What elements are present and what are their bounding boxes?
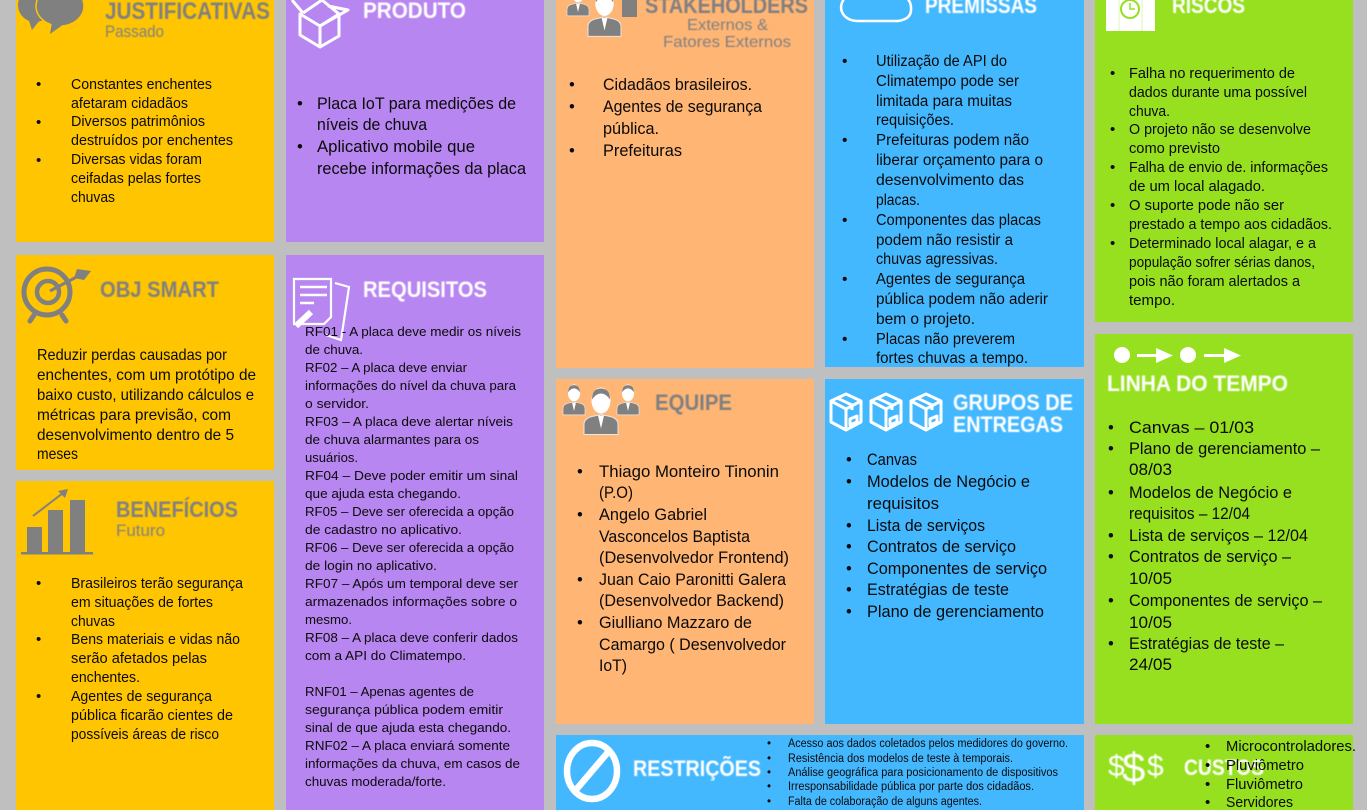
text block: timeline list: • xyxy=(1108,592,1114,610)
text block: entregas list: • xyxy=(846,603,852,621)
text block: requisitos list: com a API do Climatempo. xyxy=(305,648,466,663)
text block: entregas list: Estratégias de teste xyxy=(867,581,1009,599)
text block: requisitos list: RNF01 – Apenas agentes de xyxy=(305,684,474,699)
text block: restricoes list: Resistência dos modelos de teste à temporais. xyxy=(788,753,1013,765)
heading: equipe: EQUIPE xyxy=(655,390,732,415)
text block: restricoes list: Análise geográfica para posicionamento de dispositivos xyxy=(788,767,1058,779)
text block: requisitos list: de cadastro no aplicativo. xyxy=(305,522,462,537)
text block: justificativas list: Constantes enchentes xyxy=(71,76,212,93)
text block: justificativas list: ceifadas pelas fortes xyxy=(71,170,201,187)
text block: riscos list: • xyxy=(1110,65,1115,82)
text block: timeline list: Componentes de serviço – xyxy=(1129,592,1323,610)
text block: timeline list: Estratégias de teste – xyxy=(1129,635,1285,653)
text block: beneficios list: • xyxy=(36,631,41,648)
text block: timeline list: • xyxy=(1108,548,1114,566)
text block: entregas list: • xyxy=(846,473,852,491)
text block: entregas list: Contratos de serviço xyxy=(867,538,1016,556)
text block: stakeholders list: pública. xyxy=(603,120,659,138)
text block: beneficios list: chuvas xyxy=(71,613,115,630)
icon: dollar signs xyxy=(1108,744,1164,791)
panel: restricoes xyxy=(556,735,1084,810)
icon: timeline arrows xyxy=(1114,347,1241,363)
text block: restricoes list: • xyxy=(767,753,771,765)
text block: objective: desenvolvimento dentro de 5 xyxy=(37,427,234,444)
heading: obj smart: OBJ SMART xyxy=(100,277,220,302)
text block: justificativas list: Diversos patrimônios xyxy=(71,113,205,130)
panel: riscos xyxy=(1095,0,1353,322)
text block: premissas list: desenvolvimento das xyxy=(876,172,1024,189)
icon: dollar signs: $ xyxy=(1122,744,1145,791)
text block: requisitos list: RF06 – Deve ser oferecida a opção xyxy=(305,540,514,555)
text block: premissas list: Placas não preverem xyxy=(876,331,1015,348)
text block: custos list: Fluviômetro xyxy=(1226,776,1303,793)
text block: riscos list: prestado a tempo aos cidadãos. xyxy=(1129,216,1332,233)
subheading: externos e fatores externos: Externos & xyxy=(687,17,768,34)
text block: timeline list: 10/05 xyxy=(1129,614,1172,632)
text block: requisitos list: informações da chuva, em casos de xyxy=(305,756,520,771)
text block: custos list xyxy=(1205,738,1356,810)
text block: objective xyxy=(37,347,256,463)
text block: premissas list: podem não resistir a xyxy=(876,232,1013,249)
text block: entregas list: Componentes de serviço xyxy=(867,560,1047,578)
text block: beneficios list: • xyxy=(36,575,41,592)
text block: stakeholders list: • xyxy=(569,142,575,160)
text block: requisitos list: o servidor. xyxy=(305,396,369,411)
text block: produto list: Aplicativo mobile que xyxy=(317,138,475,156)
text block: riscos list: • xyxy=(1110,159,1115,176)
text block: requisitos list: usuários. xyxy=(305,450,358,465)
text block: timeline list: Canvas – 01/03 xyxy=(1129,419,1254,437)
text block: riscos list: como previsto xyxy=(1129,140,1220,157)
icon: cloud xyxy=(841,0,911,21)
text block: premissas list: limitada para muitas xyxy=(876,93,1012,110)
text block: beneficios list: serão afetados pelas xyxy=(71,650,207,667)
text block: timeline list: 24/05 xyxy=(1129,656,1172,674)
text block: justificativas list: Diversas vidas foram xyxy=(71,151,202,168)
text block: justificativas list: chuvas xyxy=(71,189,115,206)
text block: stakeholders list: Prefeituras xyxy=(603,142,682,160)
text block: team list: • xyxy=(577,614,583,632)
icon: three boxes xyxy=(831,394,941,430)
icon: open box xyxy=(292,0,348,47)
text block: riscos list: pois não foram alertados a xyxy=(1129,273,1301,290)
text block: produto list: níveis de chuva xyxy=(317,116,428,134)
text block: requisitos list: RF04 – Deve poder emitir um sinal xyxy=(305,468,518,483)
text block: premissas list: • xyxy=(842,132,847,149)
text block: produto list: • xyxy=(297,138,303,156)
text block: requisitos list: RF03 – A placa deve alertar níveis xyxy=(305,414,513,429)
text block: justificativas list: • xyxy=(36,76,41,93)
text block: premissas list: chuvas agressivas. xyxy=(876,251,998,268)
text block: entregas list: Modelos de Negócio e xyxy=(867,473,1030,491)
text block: riscos list: de um local alagado. xyxy=(1129,178,1265,195)
text block: riscos list: O projeto não se desenvolve xyxy=(1129,121,1311,138)
text block: beneficios list: pública ficarão cientes de xyxy=(71,707,233,724)
text block: team list: (P.O) xyxy=(599,484,633,502)
text block: objective: Reduzir perdas causadas por xyxy=(37,347,228,364)
text block: riscos list xyxy=(1110,65,1332,309)
text block: beneficios list xyxy=(36,575,244,743)
text block: requisitos list: RF01 - A placa deve medir os níveis xyxy=(305,324,521,339)
text block: requisitos list: que ajuda esta chegando. xyxy=(305,486,461,501)
text block: objective: baixo custo, utilizando cálculos e xyxy=(37,387,254,404)
text block: requisitos list: informações do nível da chuva para xyxy=(305,378,517,393)
text block: produto list: Placa IoT para medições de xyxy=(317,95,516,113)
text block: entregas list: Lista de serviços xyxy=(867,517,985,535)
text block: objective: métricas para previsão, com xyxy=(37,407,231,424)
text block: riscos list: Falha no requerimento de xyxy=(1129,65,1295,82)
text block: timeline list: requisitos – 12/04 xyxy=(1129,505,1250,523)
text block: restricoes list: • xyxy=(767,738,771,750)
text block: timeline list xyxy=(1108,419,1323,674)
text block: stakeholders list: Agentes de segurança xyxy=(603,98,763,116)
subheading: passado: Passado xyxy=(105,22,164,41)
icon: prohibited sign xyxy=(567,743,617,799)
panel: obj smart xyxy=(16,255,274,470)
text block: premissas list: Componentes das placas xyxy=(876,212,1041,229)
text block: restricoes list: • xyxy=(767,781,771,793)
text block: team list: IoT) xyxy=(599,657,627,675)
text block: beneficios list: enchentes. xyxy=(71,669,140,686)
text block: premissas list: • xyxy=(842,212,847,229)
text block: premissas list: placas. xyxy=(876,192,920,209)
subheading: externos e fatores externos xyxy=(663,17,791,51)
text block: beneficios list: possíveis áreas de risco xyxy=(71,726,219,743)
text block: justificativas list: • xyxy=(36,114,41,131)
subheading: futuro: Futuro xyxy=(116,521,165,540)
text block: timeline list: Modelos de Negócio e xyxy=(1129,484,1292,502)
text block: team list: • xyxy=(577,463,583,481)
text block: premissas list: pública podem não aderir xyxy=(876,291,1048,308)
text block: premissas list: • xyxy=(842,331,847,348)
text block: entregas list: • xyxy=(846,560,852,578)
panel: stakeholders xyxy=(556,0,814,368)
text block: riscos list: Determinado local alagar, e a xyxy=(1129,235,1317,252)
panel: grupos de entregas xyxy=(825,379,1084,724)
panel: equipe xyxy=(556,379,814,724)
text block: premissas list: Prefeituras podem não xyxy=(876,132,1029,149)
text block: team list: (Desenvolvedor Backend) xyxy=(599,592,784,610)
text block: restricoes list xyxy=(767,738,1068,808)
icon: dollar signs: $ xyxy=(1108,750,1125,783)
text block: requisitos list: armazenados informações sobre o xyxy=(305,594,517,609)
text block: entregas list: • xyxy=(846,517,852,535)
text block: objective: meses xyxy=(37,446,78,463)
text block: restricoes list: • xyxy=(767,767,771,779)
panel: produto xyxy=(286,0,544,242)
text block: requisitos list: RF02 – A placa deve enviar xyxy=(305,360,468,375)
text block: custos list: Pluviômetro xyxy=(1226,757,1304,774)
panel: requisitos xyxy=(286,255,544,810)
text block: stakeholders list xyxy=(569,76,763,160)
heading: grupos de entregas: ENTREGAS xyxy=(953,412,1063,437)
icon: bar chart xyxy=(21,489,93,554)
panel: custos xyxy=(1095,735,1356,810)
text block: riscos list: O suporte pode não ser xyxy=(1129,197,1284,214)
text block: entregas list: Canvas xyxy=(867,451,917,469)
text block: requisitos list xyxy=(305,324,521,789)
text block: entregas list: requisitos xyxy=(867,495,939,513)
text block: riscos list: tempo. xyxy=(1129,292,1175,309)
text block: beneficios list: Bens materiais e vidas não xyxy=(71,631,240,648)
heading: beneficios: BENEFÍCIOS xyxy=(116,497,238,522)
heading: linha do tempo: LINHA DO TEMPO xyxy=(1107,371,1288,396)
text block: timeline list: • xyxy=(1108,635,1114,653)
icon: team people xyxy=(563,384,639,434)
text block: requisitos list: de login no aplicativo. xyxy=(305,558,437,573)
text block: premissas list: Utilização de API do xyxy=(876,53,1007,70)
text block: riscos list: chuva. xyxy=(1129,103,1170,120)
text block: team list: (Desenvolvedor Frontend) xyxy=(599,549,789,567)
text block: beneficios list: em situações de fortes xyxy=(71,594,213,611)
text block: restricoes list: Irresponsabilidade pública por parte dos cidadãos. xyxy=(788,781,1034,793)
text block: team list xyxy=(577,463,789,675)
text block: restricoes list: Acesso aos dados coletados pelos medidores do governo. xyxy=(788,738,1068,750)
text block: justificativas list: afetaram cidadãos xyxy=(71,95,188,112)
text block: riscos list: • xyxy=(1110,121,1115,138)
heading: restricoes: RESTRIÇÕES xyxy=(633,756,761,781)
text block: requisitos list: RF08 – A placa deve conferir dados xyxy=(305,630,518,645)
text block: entregas list: Plano de gerenciamento xyxy=(867,603,1044,621)
text block: requisitos list: de chuva. xyxy=(305,342,363,357)
text block: justificativas list xyxy=(36,76,233,206)
heading: requisitos: REQUISITOS xyxy=(363,277,487,302)
text block: requisitos list: RNF02 – A placa enviará somente xyxy=(305,738,510,753)
text block: objective: enchentes, com um protótipo de xyxy=(37,367,256,384)
icon: documents xyxy=(294,279,349,340)
heading: grupos de entregas: GRUPOS DE xyxy=(953,390,1073,415)
text block: produto list: • xyxy=(297,95,303,113)
text block: team list: Giulliano Mazzaro de xyxy=(599,614,752,632)
text block: produto list: recebe informações da placa xyxy=(317,160,527,178)
text block: riscos list: • xyxy=(1110,235,1115,252)
text block: premissas list: • xyxy=(842,271,847,288)
panel: premissas xyxy=(825,0,1084,367)
text block: timeline list: 10/05 xyxy=(1129,570,1172,588)
heading: grupos de entregas xyxy=(953,390,1073,437)
text block: stakeholders list: • xyxy=(569,76,575,94)
text block: team list: Camargo ( Desenvolvedor xyxy=(599,636,786,654)
text block: team list: • xyxy=(577,571,583,589)
text block: timeline list: 08/03 xyxy=(1129,461,1172,479)
text block: custos list: Microcontroladores. xyxy=(1226,738,1356,755)
panel: beneficios xyxy=(16,481,274,810)
text block: timeline list: Lista de serviços – 12/04 xyxy=(1129,527,1308,545)
text block: requisitos list: mesmo. xyxy=(305,612,352,627)
text block: premissas list xyxy=(842,53,1048,367)
text block: timeline list: Plano de gerenciamento – xyxy=(1129,440,1321,458)
text block: requisitos list: chuvas moderada/forte. xyxy=(305,774,446,789)
text block: premissas list: requisições. xyxy=(876,112,954,129)
text block: justificativas list: destruídos por enchentes xyxy=(71,132,233,149)
text block: custos list: • xyxy=(1205,776,1210,793)
text block: stakeholders list: • xyxy=(569,98,575,116)
text block: entregas list: • xyxy=(846,538,852,556)
text block: team list: Juan Caio Paronitti Galera xyxy=(599,571,787,589)
icon: dollar signs: $ xyxy=(1147,750,1164,783)
text block: custos list: • xyxy=(1205,757,1210,774)
text block: custos list: • xyxy=(1205,738,1210,755)
icon: speech bubbles xyxy=(18,0,84,34)
text block: team list: Vasconcelos Baptista xyxy=(599,528,751,546)
text block: timeline list: • xyxy=(1108,484,1114,502)
text block: requisitos list: de chuva alarmantes para os xyxy=(305,432,479,447)
text block: riscos list: • xyxy=(1110,197,1115,214)
text block: team list: • xyxy=(577,506,583,524)
text block: premissas list: Agentes de segurança xyxy=(876,271,1025,288)
text block: premissas list: fortes chuvas a tempo. xyxy=(876,350,1028,367)
text block: riscos list: Falha de envio de. informações xyxy=(1129,159,1328,176)
text block: stakeholders list: Cidadãos brasileiros. xyxy=(603,76,752,94)
text block: produto list xyxy=(297,95,527,178)
panel: justificativas xyxy=(16,0,274,242)
text block: premissas list: Climatempo pode ser xyxy=(876,73,1019,90)
text block: team list: Thiago Monteiro Tinonin xyxy=(599,463,779,481)
text block: riscos list: população sofrer sérias danos, xyxy=(1129,254,1315,271)
heading: custos: CUSTOS xyxy=(1184,755,1264,780)
text block: premissas list: bem o projeto. xyxy=(876,311,975,328)
text block: riscos list: dados durante uma possível xyxy=(1129,84,1307,101)
text block: restricoes list: Falta de colaboração de alguns agentes. xyxy=(788,796,982,808)
subheading: externos e fatores externos: Fatores Externos xyxy=(663,34,791,51)
text block: timeline list: • xyxy=(1108,419,1114,437)
text block: timeline list: • xyxy=(1108,440,1114,458)
icon: target xyxy=(24,269,91,321)
text block: entregas list: • xyxy=(846,581,852,599)
text block: requisitos list: sinal de que ajuda esta chegando. xyxy=(305,720,511,735)
icon: stakeholder people xyxy=(567,0,637,36)
text block: restricoes list: • xyxy=(767,796,771,808)
text block: premissas list: liberar orçamento para o xyxy=(876,152,1043,169)
text block: entregas list xyxy=(846,451,1047,621)
text block: timeline list: • xyxy=(1108,527,1114,545)
text block: beneficios list: • xyxy=(36,688,41,705)
text block: premissas list: • xyxy=(842,53,847,70)
text block: requisitos list: RF05 – Deve ser oferecida a opção xyxy=(305,504,514,519)
icon: calendar clock xyxy=(1106,0,1155,31)
text block: team list: Angelo Gabriel xyxy=(599,506,707,524)
text block: requisitos list: segurança pública podem emitir xyxy=(305,702,504,717)
panel: linha do tempo xyxy=(1095,334,1353,724)
text block: requisitos list: RF07 – Após um temporal deve ser xyxy=(305,576,519,591)
text block: justificativas list: • xyxy=(36,152,41,169)
text block: timeline list: Contratos de serviço – xyxy=(1129,548,1292,566)
text block: beneficios list: Brasileiros terão segurança xyxy=(71,575,244,592)
text block: beneficios list: Agentes de segurança xyxy=(71,688,213,705)
text block: entregas list: • xyxy=(846,451,852,469)
